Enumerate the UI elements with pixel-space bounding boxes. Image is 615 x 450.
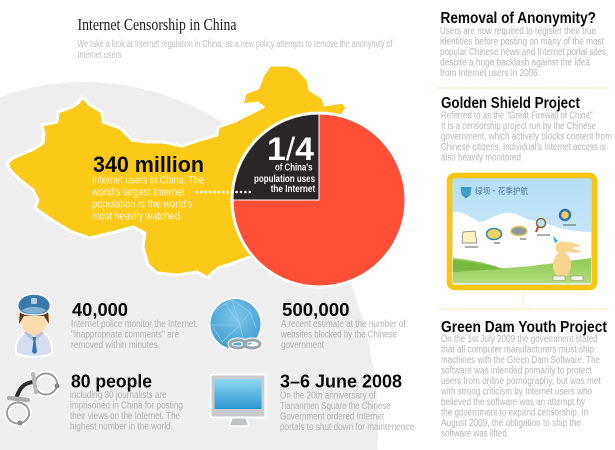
panel: golden shield project: [441, 95, 612, 164]
stat: 80 people: 80 people: [71, 372, 152, 392]
buttons: [553, 276, 583, 280]
stat: 3-6 June 2008: On the 20th anniversary of: [280, 390, 376, 402]
stat: 80 people: imprisoned in China for posting: [70, 400, 183, 412]
panel: green dam youth project: software was lifted.: [441, 428, 509, 440]
stat: 3-6 June 2008: Government ordered Internet: [280, 412, 384, 422]
stat: 40,000: 40,000: [72, 300, 128, 320]
map of China: [7, 65, 347, 278]
panel: removal of anonymity: Removal of Anonymity?: [440, 10, 596, 27]
icon: handcuffs: [7, 374, 60, 426]
pie chart: one quarter: [232, 113, 406, 287]
stat: 3-6 June 2008: Tiananmen Square the Chinese: [280, 401, 391, 412]
icon: computer monitor: [210, 374, 266, 426]
340 million stat: [91, 152, 204, 222]
stat: 500,000: websites blocked by the Chinese: [280, 330, 397, 340]
pie label: of China's: [275, 162, 313, 174]
icon: police officer: [16, 294, 52, 357]
title: Internet Censorship in China: [78, 15, 237, 34]
dotted connector: [197, 191, 250, 193]
rabbit mascot: [553, 236, 582, 278]
panel: green dam youth project: August 2009, the obligation to ship the: [441, 418, 581, 429]
340 million stat: world's largest Internet: [91, 186, 185, 198]
pie label: population uses: [254, 174, 315, 185]
stat: 80 people: [70, 372, 183, 432]
pie label: the Internet: [271, 184, 316, 195]
stat: 500,000: 500,000: [282, 300, 350, 320]
intro text: We take a look at Internet regulation in China, as a new policy attempts to remove the anonymity of: [78, 39, 393, 50]
panel: removal of anonymity: from Internet users in 2006.: [440, 68, 540, 79]
panel: golden shield project: Golden Shield Project: [441, 95, 580, 112]
pie label: [254, 131, 316, 195]
screenshot: Green Dam software: [450, 176, 594, 288]
340 million stat: population is the world's: [92, 198, 193, 210]
stat: 500,000: [280, 300, 406, 351]
panel: removal of anonymity: [440, 10, 608, 79]
grey background shape: [0, 82, 378, 450]
stat: 500,000: government: [281, 340, 324, 351]
window title: 绿坝・花季护航: [475, 186, 528, 196]
stat: 40,000: removed within minutes.: [71, 340, 160, 351]
panel: golden shield project: also heavily monitored: [441, 152, 521, 164]
stat: 40,000: [71, 300, 198, 351]
intro text: Internet users: [78, 50, 122, 61]
pie label: 1/4: [267, 131, 314, 167]
intro text: [78, 39, 393, 61]
340 million stat: most heavily watched.: [92, 210, 182, 222]
stat: 40,000: Internet police monitor the Internet.: [71, 319, 198, 330]
panel: green dam youth project: believed the software was an attempt by: [441, 397, 585, 408]
small app icons: [462, 210, 576, 248]
340 million stat: 340 million: [93, 152, 204, 177]
stat: 80 people: highest number in the world.: [70, 422, 173, 432]
icon: globe with chain: [209, 298, 262, 350]
stat: 40,000: "Inappropriate comments" are: [71, 330, 179, 340]
window title: [460, 186, 528, 198]
stat: 80 people: their views on the Internet. The: [70, 411, 180, 422]
stat: 3-6 June 2008: portals to shut down for maintenence: [280, 422, 414, 433]
stat: 3-6 June 2008: 3–6 June 2008: [280, 372, 402, 392]
panel: green dam youth project: [440, 319, 607, 440]
stat: 3-6 June 2008: [280, 372, 414, 433]
stat: 500,000: A recent estimate at the number of: [281, 319, 406, 330]
stat: 80 people: including 30 journalists are: [70, 390, 167, 401]
340 million stat: Internet users in China. The: [92, 174, 204, 186]
